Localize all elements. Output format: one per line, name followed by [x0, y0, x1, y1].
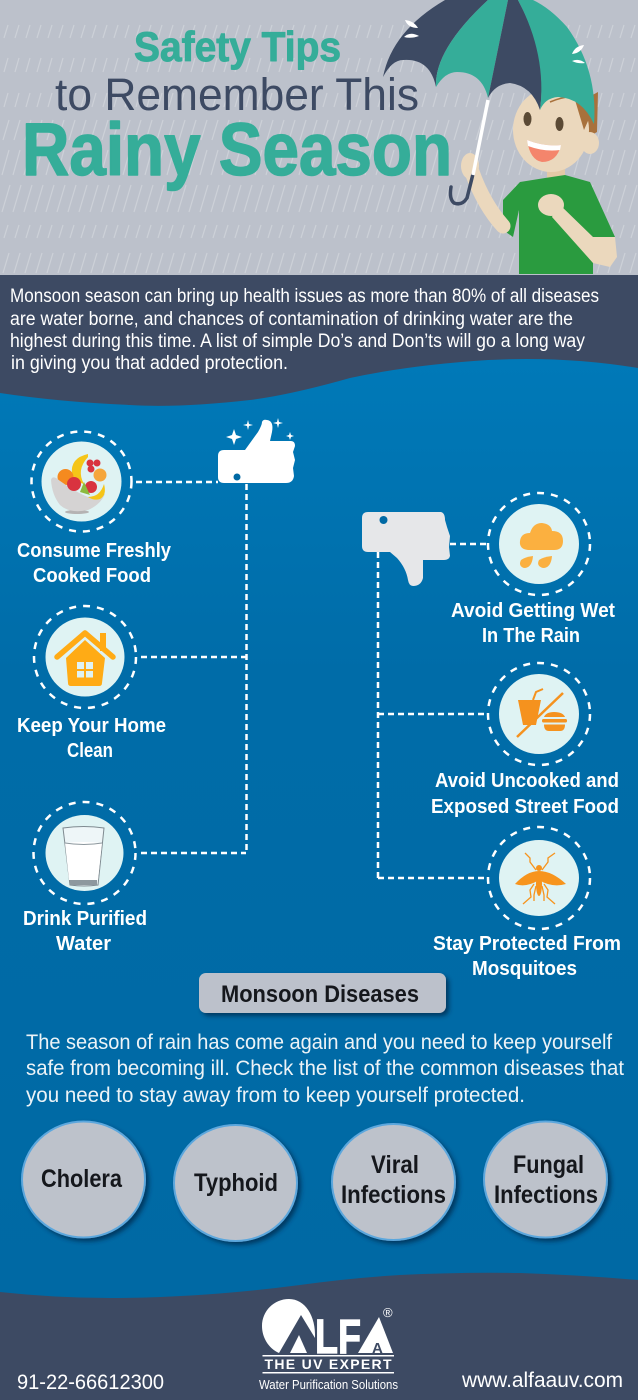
boy head [513, 88, 599, 185]
item: keep your home clean [17, 606, 166, 762]
icon: house [57, 633, 113, 686]
intro text: are water borne, and chances of contamination of drinking water are the [10, 309, 573, 330]
intro text: highest during this time. A list of simple Do’s and Don’ts will go a long way [10, 331, 585, 352]
disease: cholera: Cholera [41, 1165, 123, 1193]
icon: rain cloud [520, 523, 563, 568]
phone number: 91-22-66612300 [17, 1371, 164, 1394]
heading: monsoon diseases [199, 973, 446, 1013]
item: drink purified water [23, 802, 147, 955]
disease: typhoid: Typhoid [194, 1169, 278, 1197]
label [23, 908, 147, 955]
intro text [10, 286, 599, 374]
item: stay protected from mosquitoes [433, 827, 621, 980]
diseases paragraph: you need to stay away from to keep yourself protected. [26, 1084, 525, 1107]
label: Clean [67, 740, 113, 762]
label [433, 933, 621, 980]
title line 1: Safety Tips [134, 23, 341, 70]
icon: mosquito [515, 853, 566, 904]
label: In The Rain [482, 625, 580, 647]
icon: thumbs down [362, 512, 450, 586]
disease: fungal infections [484, 1122, 607, 1238]
item: avoid getting wet [451, 493, 615, 647]
title [22, 23, 452, 191]
label [451, 600, 615, 647]
label: Water [56, 933, 111, 955]
intro text: in giving you that added protection. [11, 353, 288, 374]
disease: viral infections: Infections [341, 1181, 446, 1209]
boy shirt [503, 175, 615, 274]
disease: typhoid [174, 1125, 297, 1241]
logo final letter: A [372, 1340, 383, 1357]
label [431, 770, 619, 818]
blue background [0, 340, 638, 1300]
illustration: boy with umbrella [383, 0, 617, 274]
intro band [0, 275, 638, 406]
label: Cooked Food [33, 565, 151, 587]
header panel [0, 0, 638, 275]
connector lines [136, 482, 488, 878]
item: consume freshly cooked food [17, 432, 172, 587]
icon: fruit bowl [51, 454, 106, 514]
disease: cholera [22, 1122, 145, 1238]
diseases paragraph: safe from becoming ill. Check the list of the common diseases that [26, 1057, 624, 1080]
disease: viral infections: Viral [371, 1151, 419, 1179]
logo letters: LF [315, 1311, 361, 1364]
logo rules [262, 1355, 394, 1374]
boy arms [461, 153, 617, 267]
umbrella canopy [383, 0, 594, 124]
diseases paragraph [26, 1031, 624, 1107]
title line 3: Rainy Season [22, 108, 452, 191]
disease: viral infections [332, 1124, 455, 1240]
rain splashes on umbrella [404, 20, 585, 63]
label [17, 540, 172, 587]
label: Drink Purified [23, 908, 147, 930]
icon: crossed out food [517, 689, 567, 737]
umbrella stick and handle [450, 100, 488, 204]
logo mark [262, 1299, 315, 1353]
icon: glass of water [63, 826, 104, 886]
heading: monsoon diseases: Monsoon Diseases [221, 981, 419, 1008]
disease: fungal infections: Fungal [513, 1151, 584, 1179]
registered mark: ® [383, 1305, 393, 1320]
diseases paragraph: The season of rain has come again and you need to keep yourself [26, 1031, 612, 1054]
label: Exposed Street Food [431, 796, 619, 818]
label: Mosquitoes [472, 958, 577, 980]
label: Consume Freshly [17, 540, 172, 562]
disease: fungal infections: Infections [494, 1181, 598, 1209]
label: Avoid Getting Wet [451, 600, 615, 622]
icon: thumbs up [218, 418, 295, 483]
sub tagline: Water Purification Solutions [259, 1378, 398, 1392]
logo [259, 1299, 398, 1392]
label: Avoid Uncooked and [435, 770, 619, 792]
label [17, 715, 166, 762]
tagline: THE UV EXPERT [264, 1356, 392, 1372]
title line 2: to Remember This [55, 69, 419, 120]
website: www.alfaauv.com [461, 1369, 623, 1392]
item: avoid street food [431, 663, 619, 818]
label: Keep Your Home [17, 715, 166, 737]
footer band [0, 1273, 638, 1400]
label: Stay Protected From [433, 933, 621, 955]
